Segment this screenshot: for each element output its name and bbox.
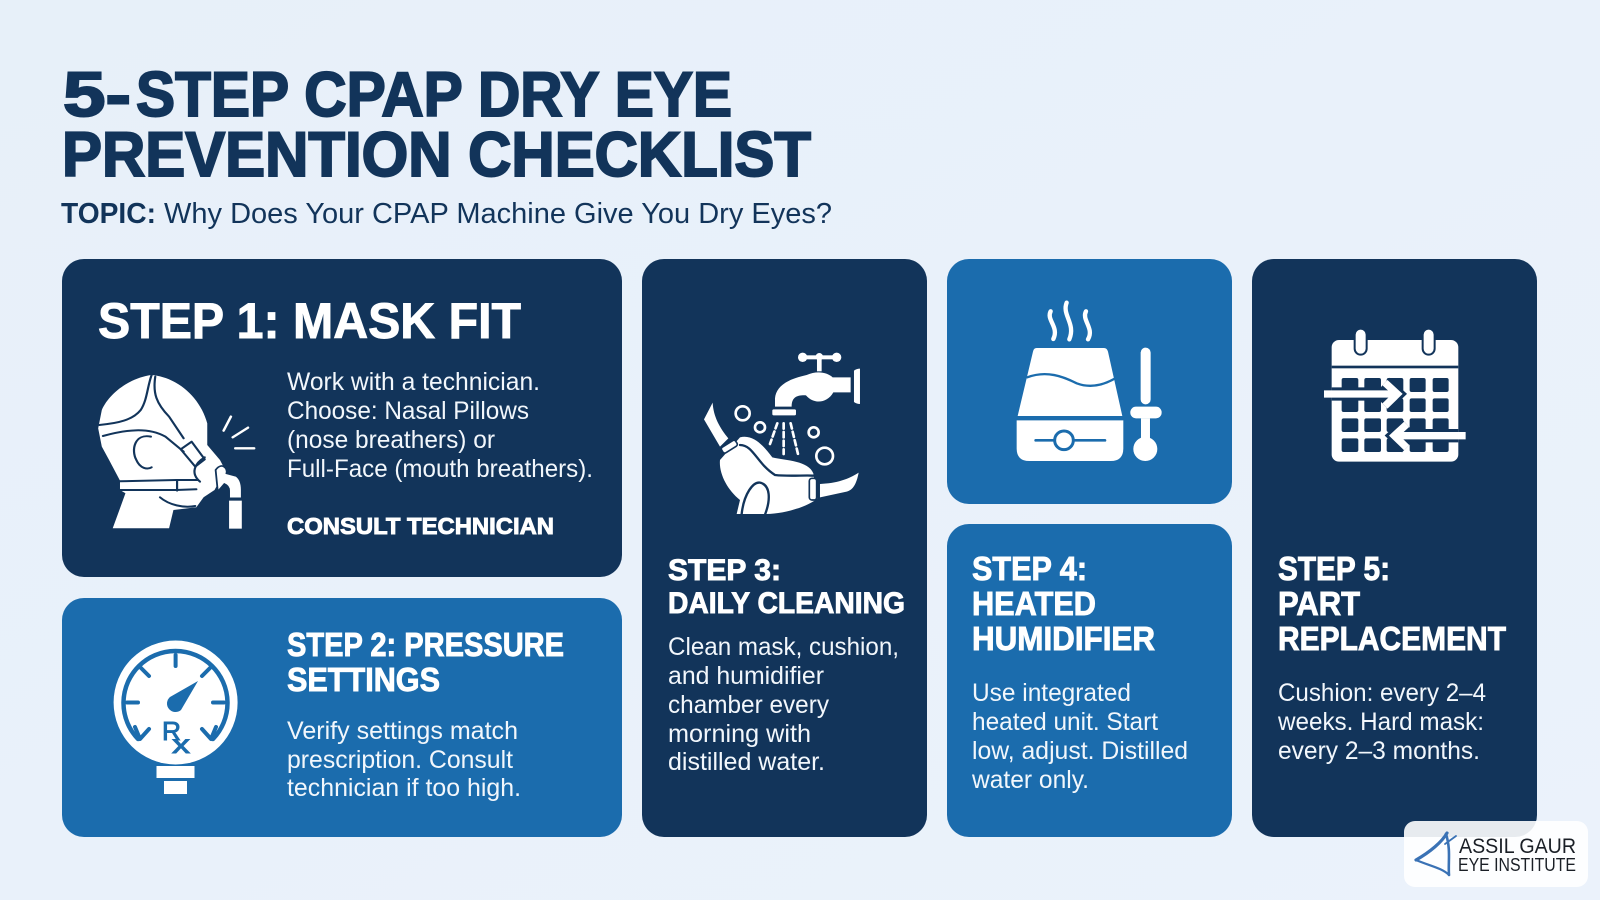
step 5 heading: REPLACEMENT bbox=[1278, 620, 1506, 657]
icon: calendar with swap arrows bbox=[1324, 329, 1466, 462]
step 2 heading bbox=[287, 626, 564, 698]
step 1 heading: STEP 1: MASK FIT bbox=[98, 293, 521, 349]
step 5 body text bbox=[1277, 679, 1486, 765]
step 3 body text bbox=[668, 633, 899, 776]
step 1 body text: Full-Face (mouth breathers). bbox=[287, 455, 593, 483]
step 2 body text bbox=[287, 717, 521, 802]
step 5 body text: Cushion: every 2–4 bbox=[1278, 679, 1486, 707]
icon: head wearing CPAP mask bbox=[98, 375, 254, 529]
step 5 body text: weeks. Hard mask: bbox=[1277, 708, 1484, 736]
panel: step 3 daily cleaning bbox=[642, 259, 927, 837]
step 3 body text: morning with bbox=[668, 720, 811, 748]
step 3 heading bbox=[668, 554, 905, 620]
step 1 body text bbox=[287, 368, 593, 483]
step 2 body text: Verify settings match bbox=[287, 717, 518, 745]
step 3 body text: and humidifier bbox=[668, 662, 824, 690]
panel: step 5 part replacement bbox=[1252, 259, 1537, 837]
step 3 body text: Clean mask, cushion, bbox=[668, 633, 899, 661]
step 2 body text: technician if too high. bbox=[287, 774, 521, 802]
subtitle: topic: TOPIC: bbox=[61, 198, 156, 230]
step 5 heading bbox=[1278, 550, 1506, 657]
logo wordmark bbox=[1458, 835, 1576, 875]
icon: mask washed under faucet bbox=[704, 353, 860, 515]
step 4 body text: water only. bbox=[971, 766, 1089, 794]
step 4 body text: low, adjust. Distilled bbox=[972, 737, 1188, 765]
step 2 body text: prescription. Consult bbox=[287, 746, 513, 774]
subtitle: topic: Why Does Your CPAP Machine Give You Dry Eyes? bbox=[164, 198, 832, 230]
logo mark bbox=[1416, 833, 1456, 875]
logo: Assil Gaur Eye Institute bbox=[1404, 821, 1588, 887]
icon: heated humidifier and thermometer bbox=[1017, 303, 1162, 461]
step 1 body text: Choose: Nasal Pillows bbox=[287, 397, 529, 425]
step 4 body text: Use integrated bbox=[972, 679, 1131, 707]
step 3 heading: DAILY CLEANING bbox=[668, 587, 905, 620]
step 3 heading: STEP 3: bbox=[668, 554, 781, 587]
icon: pressure gauge with Rx bbox=[114, 640, 238, 794]
step 4 body text: heated unit. Start bbox=[972, 708, 1158, 736]
step 4 heading: HUMIDIFIER bbox=[972, 620, 1155, 657]
panel: step 1 mask fit bbox=[62, 259, 622, 577]
panel: step 2 pressure settings bbox=[62, 598, 622, 837]
panel: step 4 heated humidifier bbox=[947, 524, 1232, 837]
panel: humidifier icon tile bbox=[947, 259, 1232, 504]
step 4 heading bbox=[972, 550, 1155, 657]
logo wordmark: ASSIL GAUR bbox=[1459, 835, 1576, 858]
title bbox=[62, 60, 811, 190]
step 3 body text: distilled water. bbox=[668, 748, 825, 776]
title: PREVENTION CHECKLIST bbox=[62, 120, 811, 190]
step 5 body text: every 2–3 months. bbox=[1278, 737, 1480, 765]
step 4 heading: HEATED bbox=[972, 585, 1096, 622]
icon: pressure gauge with Rx: x bbox=[172, 729, 190, 759]
step 5 heading: PART bbox=[1278, 585, 1360, 622]
step 4 body text bbox=[971, 679, 1188, 794]
icon: pressure gauge with Rx: R bbox=[162, 716, 181, 746]
consult technician callout: CONSULT TECHNICIAN bbox=[287, 513, 554, 539]
step 5 heading: STEP 5: bbox=[1278, 550, 1390, 587]
step 3 body text: chamber every bbox=[668, 691, 829, 719]
step 4 heading: STEP 4: bbox=[972, 550, 1087, 587]
step 1 body text: Work with a technician. bbox=[287, 368, 540, 396]
title: STEP CPAP DRY EYE bbox=[136, 60, 732, 130]
step 2 heading: STEP 2: PRESSURE bbox=[287, 626, 564, 663]
logo wordmark: EYE INSTITUTE bbox=[1458, 855, 1576, 875]
step 2 heading: SETTINGS bbox=[287, 661, 440, 698]
title: 5- bbox=[63, 60, 131, 130]
step 1 body text: (nose breathers) or bbox=[287, 426, 495, 454]
